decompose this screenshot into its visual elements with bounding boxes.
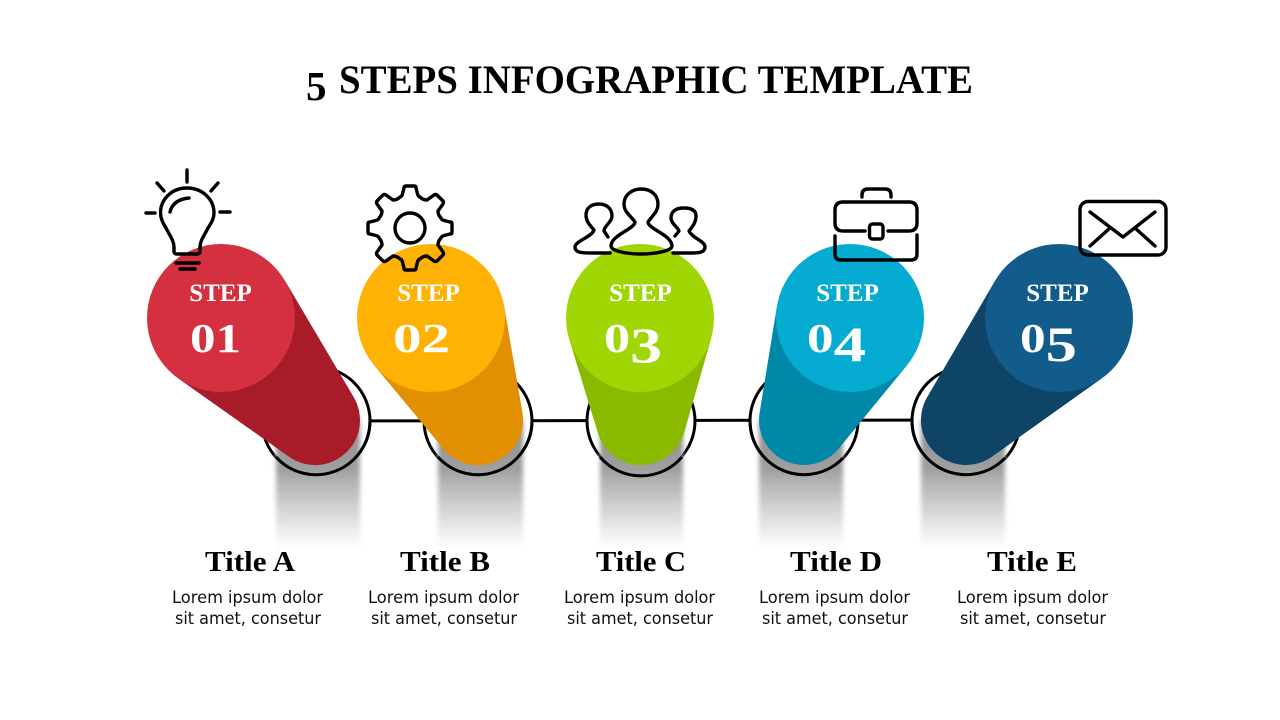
- shadow 3: [600, 420, 683, 550]
- heading A: Title A: [205, 546, 295, 578]
- heading D: Title D: [790, 546, 882, 578]
- step 1: [147, 244, 370, 550]
- ring outline 4: [750, 421, 843, 475]
- shadow 1: [276, 420, 360, 550]
- body B: sit amet, consetur: [371, 609, 517, 628]
- cylinder 1: [178, 280, 360, 465]
- step label 3: STEP: [609, 280, 672, 307]
- cap 4: [776, 244, 924, 392]
- title numeral: 5: [306, 63, 326, 109]
- step 2: [357, 244, 532, 550]
- base ring 4: [750, 367, 858, 475]
- shadow 4: [759, 420, 843, 550]
- icon: gear: [368, 186, 452, 270]
- body C: sit amet, consetur: [567, 609, 713, 628]
- title words: STEPS INFOGRAPHIC TEMPLATE: [339, 57, 973, 102]
- icon: light bulb: [146, 170, 230, 269]
- icon: briefcase: [835, 189, 917, 260]
- cylinder 3: [569, 338, 711, 465]
- icon: envelope: [1080, 202, 1166, 255]
- cap 5: [985, 244, 1133, 392]
- base ring 5: [912, 367, 1020, 475]
- body A: ipsum dolor: [228, 588, 323, 607]
- text block A: [172, 546, 323, 628]
- body D: ipsum dolor: [815, 588, 910, 607]
- body D: sit amet, consetur: [762, 609, 908, 628]
- number 1: 01: [190, 315, 241, 361]
- body E: ipsum dolor: [1013, 588, 1108, 607]
- ring outline 2: [438, 421, 532, 475]
- connector line: [316, 420, 966, 421]
- number 3: 3: [630, 317, 662, 373]
- icon: people: [575, 189, 705, 254]
- heading B: Title B: [400, 546, 490, 578]
- body E: Lorem: [957, 588, 1008, 607]
- heading C: Title C: [596, 546, 686, 578]
- number 3: 0: [604, 315, 624, 361]
- base ring 1: [262, 367, 370, 475]
- text block C: [564, 546, 715, 628]
- body D: Lorem: [759, 588, 810, 607]
- body C: Lorem: [564, 588, 615, 607]
- number 4: 0: [807, 315, 828, 361]
- number 4: 4: [834, 316, 866, 372]
- body E: sit amet, consetur: [960, 609, 1106, 628]
- step label 2: STEP: [397, 280, 460, 307]
- step 5: [912, 244, 1133, 550]
- cylinder 5: [921, 281, 1102, 465]
- body A: sit amet, consetur: [175, 609, 321, 628]
- body A: Lorem: [172, 588, 223, 607]
- body B: ipsum dolor: [424, 588, 519, 607]
- ring outline 1: [276, 421, 370, 475]
- ring outline 5: [912, 421, 1005, 475]
- title: [306, 57, 973, 109]
- number 5: 5: [1046, 316, 1077, 372]
- step label 5: STEP: [1026, 280, 1089, 307]
- text block E: [957, 546, 1108, 628]
- base ring 3: [587, 367, 695, 475]
- step label 1: STEP: [189, 280, 252, 307]
- shadow 5: [921, 420, 1005, 550]
- cap 1: [147, 244, 295, 392]
- ring outline 3: [600, 457, 682, 476]
- heading E: Title E: [987, 546, 1077, 578]
- base ring 2: [424, 367, 532, 475]
- number 2: 02: [393, 315, 450, 361]
- cylinder 2: [374, 306, 523, 465]
- cylinder 4: [759, 306, 907, 465]
- body C: ipsum dolor: [620, 588, 715, 607]
- text block B: [368, 546, 519, 628]
- step 3: [566, 244, 714, 550]
- cap 2: [357, 244, 505, 392]
- step label 4: STEP: [816, 280, 879, 307]
- cap 3: [566, 244, 714, 392]
- shadow 2: [438, 420, 523, 550]
- body B: Lorem: [368, 588, 419, 607]
- step 4: [750, 244, 924, 550]
- number 5: 0: [1020, 315, 1040, 361]
- text block D: [759, 546, 910, 628]
